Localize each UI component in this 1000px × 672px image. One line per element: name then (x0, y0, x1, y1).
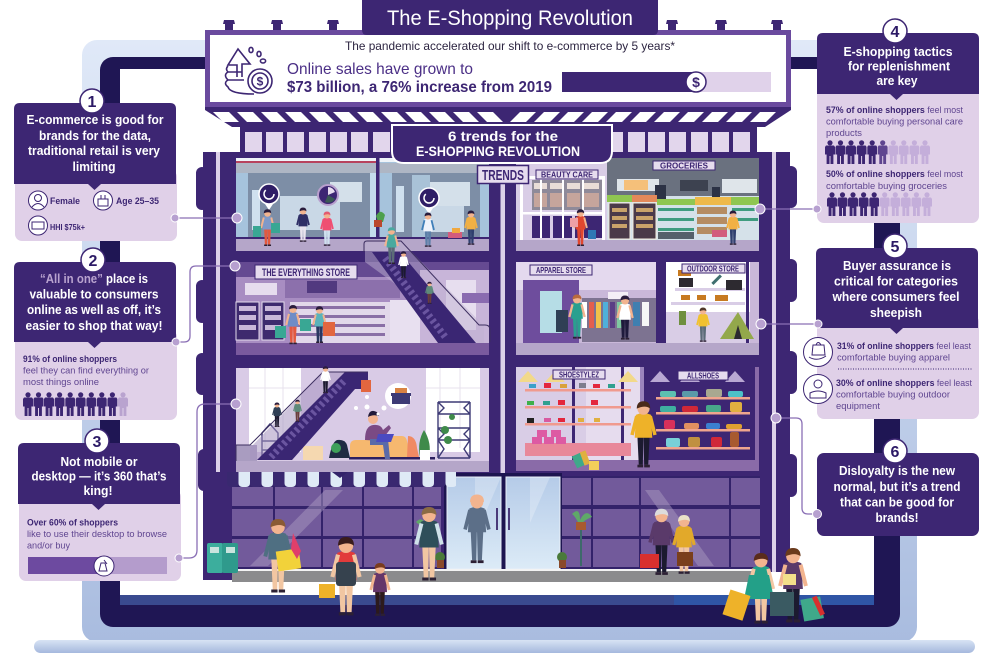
panel 3 stat (27, 518, 167, 552)
plant rack (438, 402, 470, 458)
door guard (465, 494, 489, 563)
panel 1 heading: brands for the data, (39, 128, 151, 143)
shoppers floor 1 (253, 208, 477, 247)
title: The E-Shopping Revolution (387, 7, 633, 30)
panel 5 heading (832, 258, 960, 320)
trends label (478, 166, 528, 184)
panel 2 heading: “All in one” place is (40, 271, 148, 286)
couple with shopping bags (722, 548, 825, 624)
panel 4: replenishment (817, 19, 979, 223)
panel 2 heading: easier to shop that way! (26, 318, 162, 333)
mother and child (319, 537, 389, 616)
store signs: OUTDOOR STORE (687, 264, 739, 274)
panel 3 heading: desktop — it’s 360 that’s (32, 468, 166, 484)
floor 1: beauty care and groceries (516, 158, 759, 251)
billboard stat: Online sales have grown to (287, 61, 473, 78)
panel 5: buyer assurance (804, 234, 979, 419)
apparel stat (837, 341, 971, 364)
pictogram: 9 of 10 (23, 392, 128, 416)
panel 5 heading: critical for categories (834, 274, 958, 288)
billboard stat (287, 61, 552, 96)
store signs: SHOESTYLEZ (559, 370, 599, 380)
stat: personal care: 57% of online shoppers feel most (826, 105, 963, 116)
panel 1 heading (26, 112, 164, 174)
lower escalator (236, 372, 368, 461)
number badge 2: 2 (89, 253, 98, 270)
pictogram: 57% (825, 140, 930, 164)
panel 3 stat: Over 60% of shoppers (27, 518, 118, 528)
panel 1: data (14, 89, 177, 241)
billboard (208, 32, 788, 104)
panel 2 stat: most things online (23, 377, 99, 388)
outdoor stat (836, 378, 972, 412)
rack under escalator (262, 424, 278, 459)
panel 3 stat: like to use their desktop to browse (27, 529, 167, 540)
apparel stat: 31% of online shoppers feel least (837, 341, 971, 352)
stat: personal care: comfortable buying personal care (826, 116, 963, 128)
number badge 3: 3 (93, 434, 102, 451)
storefront building (196, 20, 825, 624)
panel 3 heading: king! (84, 483, 112, 498)
store signs (255, 160, 745, 380)
shopper in yellow (632, 401, 655, 467)
billboard stat: $73 billion, a 76% increase from 2019 (287, 79, 552, 96)
panel 6 heading: normal, but it’s a trend (834, 479, 961, 494)
number badge 6 (883, 439, 907, 463)
escalators (236, 227, 490, 461)
number badge 1: 1 (88, 94, 97, 111)
panel 3 heading (32, 454, 166, 498)
store signs: THE EVERYTHING STORE (262, 267, 350, 279)
apparel stat: comfortable buying apparel (837, 352, 950, 364)
potted plants (416, 511, 592, 568)
number badge 5 (883, 234, 907, 258)
store awning (227, 472, 456, 487)
panel 4 heading: are key (876, 73, 918, 88)
panel 6 heading: brands! (876, 510, 918, 525)
demographics: Age 25–35 (116, 196, 160, 207)
progress bar: 76%: $ (692, 74, 700, 90)
panel 5 heading: Buyer assurance is (843, 258, 951, 273)
pictogram: 50% (827, 192, 932, 216)
awning under billboard (205, 104, 791, 127)
progress bar: 76% (562, 72, 771, 92)
doors (444, 473, 562, 572)
heading: 6 trends (392, 125, 612, 163)
number badge 5: 5 (891, 239, 900, 256)
panel 6 heading: that can be good for (840, 494, 954, 510)
panel 2 stat: feel they can find everything or (23, 366, 149, 376)
demographics: Female (50, 196, 80, 207)
panel 2 heading (26, 271, 162, 333)
floor 3: living space (236, 368, 489, 472)
progress bar: 60% (28, 556, 167, 576)
panel 1 heading: E-commerce is good for (26, 112, 164, 127)
upper escalator (364, 241, 490, 343)
store signs: GROCERIES (660, 160, 708, 170)
heading: 6 trends: E-SHOPPING REVOLUTION (416, 143, 580, 159)
panel 4 heading (844, 44, 952, 88)
woman at door (416, 507, 442, 580)
panel 3 connector dot (171, 214, 183, 562)
panel 2 stat (23, 354, 149, 388)
elderly couple (640, 509, 694, 575)
panel 1 heading: traditional retail is very (28, 143, 161, 158)
number badge 4: 4 (891, 24, 900, 41)
panel 3 heading: Not mobile or (60, 454, 138, 469)
stat: groceries: 50% of online shoppers feel most (826, 169, 963, 180)
sofa and shopper (349, 411, 435, 460)
stat: personal care: products (826, 128, 862, 139)
icon: outdoor person (804, 374, 832, 404)
panel 2 heading: valuable to consumers (30, 286, 158, 302)
store signs: BEAUTY CARE (541, 170, 593, 180)
panel 2: all in one (14, 248, 177, 420)
number badge 3 (85, 429, 109, 453)
panel 1 heading: limiting (72, 159, 116, 174)
stat: groceries (826, 169, 963, 192)
demographics (28, 191, 160, 235)
stat: groceries: comfortable buying groceries (826, 181, 947, 192)
stat: personal care (826, 105, 963, 139)
connector lines (175, 204, 818, 558)
shoppers floor 2 (275, 305, 335, 344)
side pillars (216, 152, 776, 572)
ground floor storefront (207, 472, 825, 624)
panel 5 heading: sheepish (870, 305, 922, 320)
store signs: ALLSHOES (687, 370, 719, 380)
number badge 6: 6 (891, 444, 900, 461)
floor 2: the everything store (236, 262, 489, 355)
right connector dots (812, 205, 822, 518)
panel 2 heading: online as well as off, it’s (27, 302, 161, 317)
icon: coins and growth arrow: $ (257, 74, 264, 88)
panel 3 stat: and/or buy (27, 540, 70, 552)
demographics: HHI $75k+ (50, 223, 85, 232)
atm machines (207, 543, 238, 573)
floor 3: shoe stores (516, 367, 759, 471)
title (362, 0, 658, 35)
thought bubble (354, 383, 411, 416)
chart pins (259, 184, 439, 214)
panel 6 heading: Disloyalty is the new (839, 463, 956, 478)
number badge 4 (883, 19, 907, 43)
outdoor stat: 30% of online shoppers feel least (836, 378, 972, 389)
floor 1: fashion store (236, 158, 489, 251)
number badge 1 (80, 89, 104, 113)
panel 3: 360 (18, 429, 181, 581)
building body (196, 118, 797, 580)
panel 2 stat: 91% of online shoppers (23, 354, 117, 365)
woman with bags (265, 519, 301, 592)
billboard subhead: The pandemic accelerated our shift to e-commerce by 5 years* (345, 39, 675, 53)
heading: 6 trends: 6 trends for the (448, 129, 559, 144)
rooftop vents (223, 20, 783, 30)
trends label: TRENDS (482, 167, 524, 184)
store signs: APPAREL STORE (536, 265, 586, 275)
icon: coins and growth arrow (226, 47, 272, 94)
shopping bags on floor (572, 450, 599, 470)
panel 6: disloyalty (817, 439, 979, 536)
panel 4 heading: for replenishment (848, 58, 951, 74)
icon: apparel hand (804, 338, 832, 366)
panel 5 heading: where consumers feel (832, 289, 960, 304)
floor 2: apparel and outdoor stores (516, 262, 759, 355)
panel 6 heading (834, 463, 961, 525)
upper windows (245, 132, 750, 152)
number badge 2 (81, 248, 105, 272)
pavement (232, 569, 762, 582)
outdoor stat: equipment (836, 401, 880, 412)
outdoor stat: comfortable buying outdoor (836, 390, 950, 400)
panel 4 heading: E-shopping tactics (844, 44, 952, 59)
